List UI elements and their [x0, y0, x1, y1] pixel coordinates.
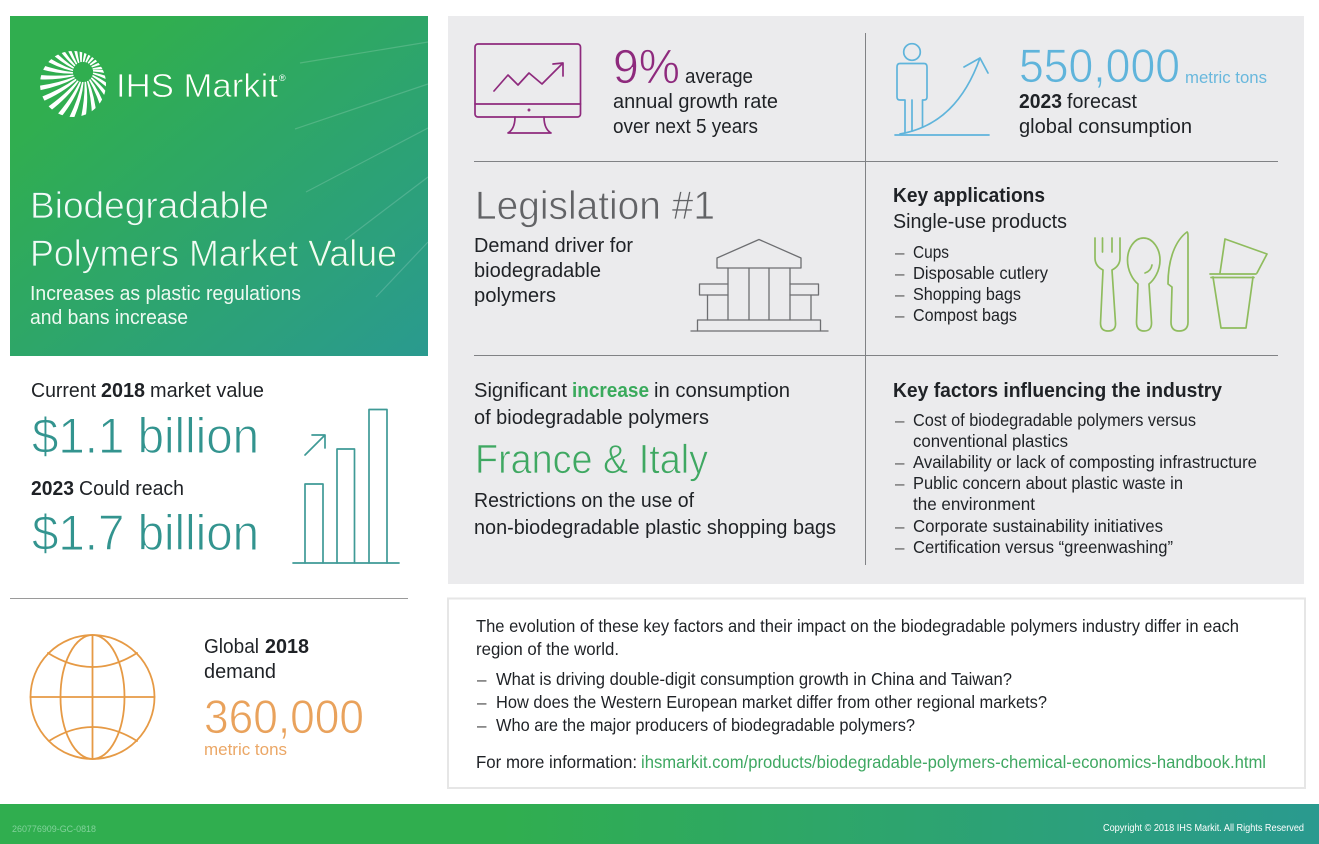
- panel: further information box: How does the Western European market differ from other regional markets?: [496, 692, 1047, 712]
- panel: market value: [31, 380, 399, 563]
- list: key factors: conventional plastics: [913, 431, 1068, 451]
- subheading: and bans increase: [30, 307, 188, 329]
- footer bar: [0, 804, 1319, 844]
- text: france and italy: increase: [572, 380, 649, 402]
- panel: further information box: [448, 598, 1305, 788]
- panel: further information box: region of the world.: [476, 639, 619, 659]
- stat: legislation #1: [474, 184, 715, 307]
- bar chart icon: [293, 410, 399, 563]
- icon: government building: [691, 240, 828, 331]
- list: key factors: Availability or lack of composting infrastructure: [913, 452, 1257, 472]
- panel: further information box: For more information:: [476, 752, 637, 772]
- heading: Biodegradable Polymers Market Value: [30, 185, 397, 274]
- stat: 550,000 metric tons: metric tons: [1185, 68, 1267, 87]
- text: 2023 could reach label: Could reach: [79, 478, 184, 500]
- list: key applications: Single-use products: [893, 211, 1067, 233]
- text: global 2018 demand: 2018: [265, 636, 309, 658]
- text: france and italy: [474, 380, 836, 539]
- list: key applications: Cups: [913, 242, 949, 262]
- text: current 2018 label: 2018: [101, 380, 145, 402]
- list: key factors: –: [895, 474, 905, 493]
- text: 2023 could reach label: [31, 478, 184, 500]
- list: key applications: [893, 185, 1067, 325]
- icon: globe: [30, 635, 154, 759]
- list: key factors: –: [895, 411, 905, 430]
- stat: 550,000 metric tons: 550,000: [1019, 39, 1180, 92]
- list: key applications: –: [895, 306, 905, 325]
- stat: 550,000 metric tons: 2023: [1019, 91, 1062, 113]
- panel: gray key stats: [448, 16, 1304, 584]
- list: key factors: Certification versus “greenwashing”: [913, 537, 1173, 557]
- divider: [10, 598, 408, 600]
- text: current 2018 label: Current: [31, 380, 96, 402]
- panel: green title header: [10, 16, 428, 356]
- subheading: [30, 283, 301, 329]
- list: key factors: Cost of biodegradable polymers versus: [913, 410, 1196, 430]
- list: key factors: –: [895, 453, 905, 472]
- text: 2023 could reach label: 2023: [31, 478, 74, 500]
- stat: $1.1 billion: $1.1 billion: [32, 408, 259, 464]
- icon: logo starburst: [40, 51, 106, 117]
- stat: 9% growth: 9%: [613, 41, 680, 94]
- stat: 360,000 metric tons: 360,000: [204, 690, 364, 743]
- text: france and italy: non-biodegradable plastic shopping bags: [474, 517, 836, 539]
- list: key applications: Compost bags: [913, 305, 1017, 325]
- list: key applications: –: [895, 243, 905, 262]
- stat: 9% growth: annual growth rate: [613, 91, 778, 113]
- list: key factors: the environment: [913, 494, 1035, 514]
- footer bar: 260776909-GC-0818: [12, 824, 96, 835]
- stat: legislation #1: biodegradable: [474, 260, 601, 282]
- text: france and italy: Significant: [474, 380, 567, 402]
- heading: Biodegradable Polymers Market Value: Polymers Market Value: [30, 233, 397, 274]
- list: key factors: Key factors influencing the industry: [893, 380, 1223, 402]
- text: global 2018 demand: demand: [204, 661, 276, 683]
- subheading: Increases as plastic regulations: [30, 283, 301, 305]
- stat: 9% growth: over next 5 years: [613, 116, 758, 138]
- logo: IHS Markit: IHS Markit: [116, 67, 278, 104]
- stat: legislation #1: polymers: [474, 285, 556, 307]
- panel: further information box: What is driving double-digit consumption growth in China and Taiwan?: [496, 669, 1012, 689]
- list: key factors: –: [895, 538, 905, 557]
- icon: person with rising arrow: [895, 44, 989, 135]
- icon: cutlery and cups: [1095, 232, 1267, 331]
- text: france and italy: of biodegradable polymers: [474, 407, 709, 429]
- stat: 550,000 metric tons: [1019, 39, 1267, 138]
- panel: further information box: –: [477, 693, 487, 712]
- text: france and italy: Restrictions on the use of: [474, 490, 694, 512]
- text: france and italy: in consumption: [654, 380, 790, 402]
- stat: legislation #1: Demand driver for: [474, 235, 633, 257]
- text: global 2018 demand: Global: [204, 636, 259, 658]
- stat: legislation #1: Legislation #1: [475, 184, 715, 228]
- stat: 9% growth: average: [685, 66, 753, 88]
- text: global 2018 demand: [204, 636, 309, 683]
- stat: 360,000 metric tons: metric tons: [204, 740, 287, 759]
- text: current 2018 label: [31, 380, 264, 402]
- heading: Biodegradable Polymers Market Value: Biodegradable: [30, 185, 269, 226]
- stat: 550,000 metric tons: forecast: [1067, 91, 1137, 113]
- list: key factors: Public concern about plastic waste in: [913, 473, 1183, 493]
- panel: further information box: Who are the major producers of biodegradable polymers?: [496, 715, 915, 735]
- stat: $1.7 billion: $1.7 billion: [32, 505, 259, 561]
- list: key applications: Shopping bags: [913, 284, 1021, 304]
- text: france and italy: France & Italy: [475, 436, 708, 482]
- stat: 550,000 metric tons: global consumption: [1019, 116, 1192, 138]
- text: current 2018 label: market value: [150, 380, 264, 402]
- icon: monitor with growth line: [475, 44, 580, 133]
- panel: further information box: –: [477, 716, 487, 735]
- panel: further information box: The evolution of these key factors and their impact on the biodegradable polymers industry differ in each: [476, 616, 1239, 636]
- list: key factors: [893, 380, 1257, 557]
- panel: further information box: –: [477, 670, 487, 689]
- list: key applications: –: [895, 285, 905, 304]
- panel: global demand: [30, 635, 364, 759]
- list: key factors: –: [895, 517, 905, 536]
- list: key applications: –: [895, 264, 905, 283]
- panel: further information box: ihsmarkit.com/products/biodegradable-polymers-chemical-economics-handbook.html: [641, 752, 1266, 772]
- list: key applications: Disposable cutlery: [913, 263, 1048, 283]
- logo: IHS Markit: [40, 51, 286, 117]
- stat: 9% growth: [613, 41, 778, 138]
- list: key applications: Key applications: [893, 185, 1045, 207]
- list: key factors: Corporate sustainability initiatives: [913, 516, 1163, 536]
- logo: IHS Markit: ®: [279, 73, 286, 83]
